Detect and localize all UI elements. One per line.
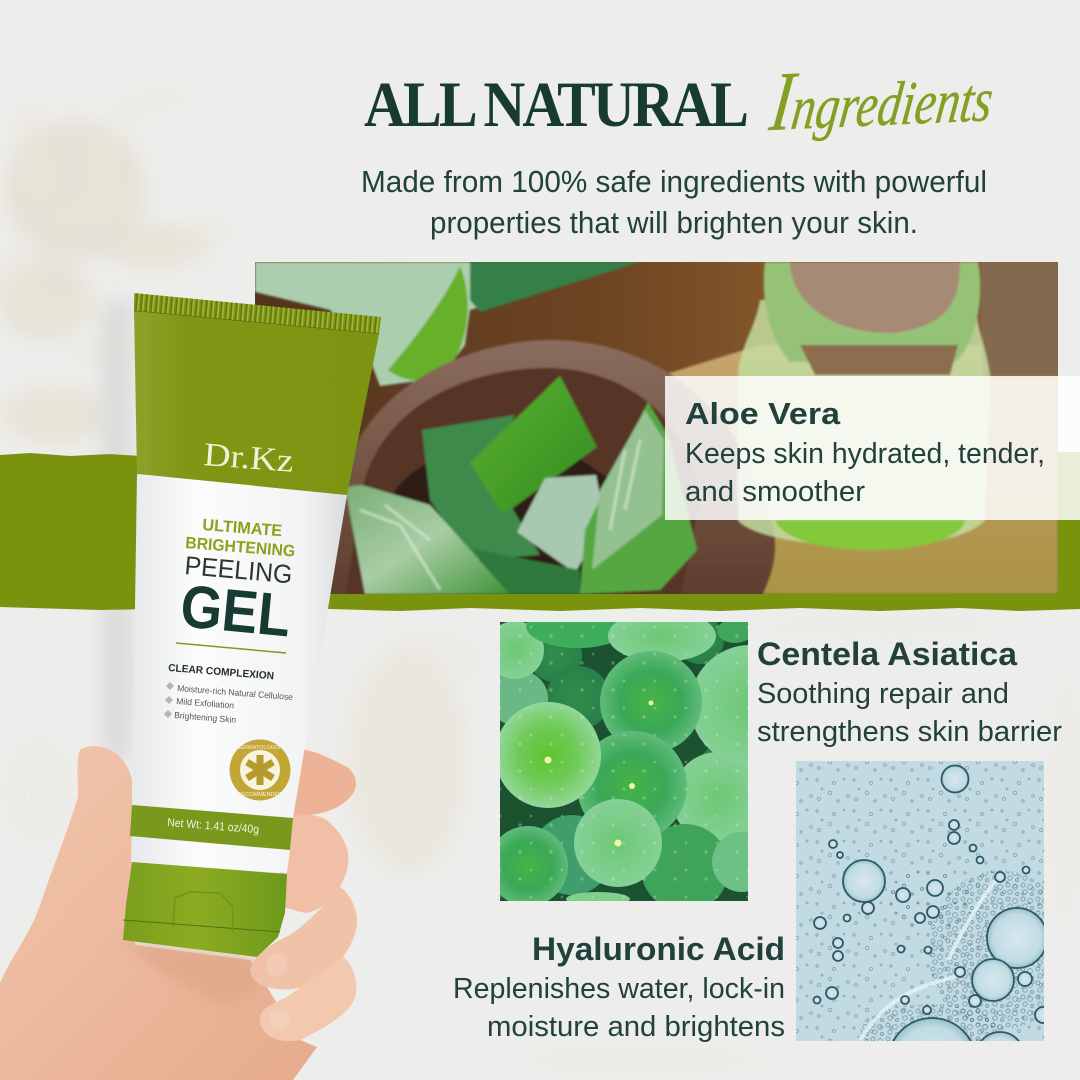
aloe vera callout [665, 376, 1080, 520]
aloe pieces [345, 376, 697, 594]
tube cap [123, 862, 287, 957]
aloe vera callout: Aloe Vera [685, 396, 841, 431]
translucent label panel [665, 376, 1080, 520]
centella callout: Soothing repair and [757, 678, 1009, 710]
hyaluronic callout [453, 931, 785, 1043]
tube label text: Dr.Kz [202, 437, 295, 480]
tube label text: Brightening Skin [174, 710, 237, 725]
hyaluronic callout: Hyaluronic Acid [532, 931, 785, 967]
heading: Ingredients script: Ingredients [765, 46, 1000, 149]
centella callout: strengthens skin barrier [757, 716, 1062, 748]
tube crimp [134, 293, 381, 334]
centella callout: Centela Asiatica [757, 636, 1017, 672]
torn green band [0, 452, 1080, 611]
tube label text: GEL [178, 572, 294, 649]
hand: fingertips in front of tube [250, 887, 357, 1041]
photo: centella leaves [500, 622, 748, 901]
product tube [123, 293, 381, 957]
tube label text: PEELING [183, 550, 294, 589]
intro text [361, 164, 987, 240]
tube label text: Net Wt: 1.41 oz/40g [167, 817, 259, 836]
tube label text: CLEAR COMPLEXION [168, 662, 274, 682]
intro text: properties that will brighten your skin. [430, 205, 918, 240]
tube label text: Mild Exfoliation [176, 696, 235, 711]
photo: hyaluronic bubbles [796, 761, 1044, 1041]
hand behind tube: palm, thumb and upper fingers [0, 746, 356, 1080]
dermatologist seal: DERMATOLOGIST [236, 745, 284, 751]
glass jar with cork [738, 262, 990, 550]
photo: aloe vera bowl and jar [255, 262, 1058, 600]
hyaluronic callout: Replenishes water, lock-in [453, 973, 785, 1005]
intro text: Made from 100% safe ingredients with powerful [361, 164, 987, 199]
tube label text: ULTIMATE [202, 516, 283, 540]
wood table top [660, 345, 1058, 594]
heading: ALL NATURAL: ALL NATURAL [364, 69, 747, 141]
tube label text: BRIGHTENING [185, 534, 296, 561]
heading [364, 46, 1000, 149]
dermatologist seal [230, 740, 290, 800]
aloe leaf in background [255, 262, 640, 386]
aloe vera callout: Keeps skin hydrated, tender, [685, 438, 1045, 470]
tube white body [131, 474, 347, 873]
net weight band [130, 805, 293, 850]
tube upper green [134, 311, 379, 495]
hyaluronic callout: moisture and brightens [487, 1011, 785, 1043]
wooden bowl [330, 340, 775, 600]
aloe vera callout: and smoother [685, 476, 865, 508]
tube label text: Moisture-rich Natural Cellulose [177, 683, 293, 702]
tube label text [164, 437, 296, 836]
centella callout [757, 636, 1062, 748]
dermatologist seal: RECOMMENDED [238, 792, 282, 798]
